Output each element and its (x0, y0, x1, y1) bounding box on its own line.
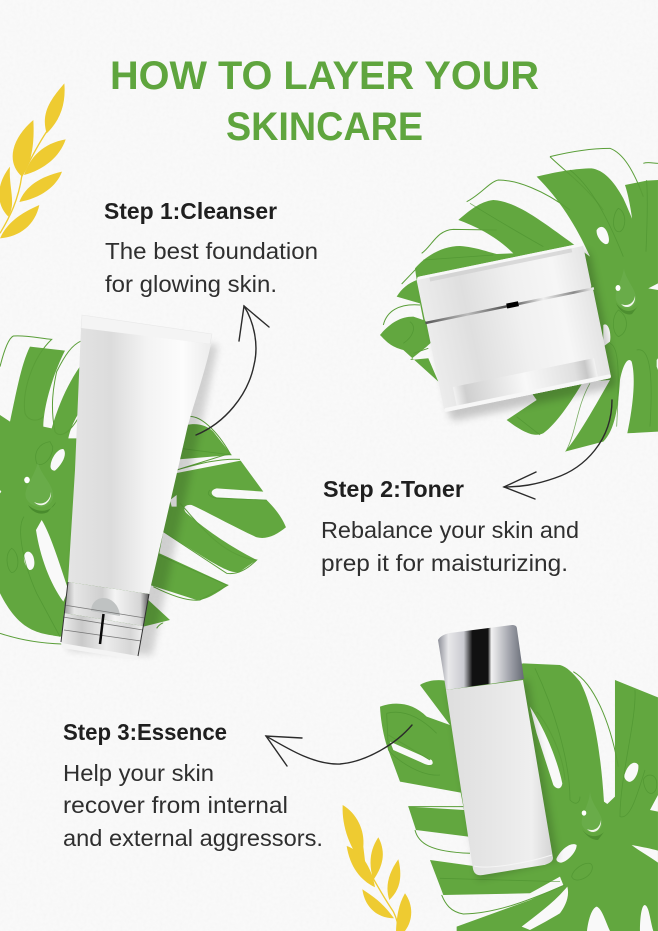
leaf fill left (0, 347, 286, 637)
step 3 heading: Step 3:Essence (63, 719, 227, 745)
arrow: step 1 (196, 306, 269, 435)
step 1 description: The best foundation (105, 238, 318, 264)
title (110, 54, 539, 149)
water drop left (24, 462, 56, 514)
step 1 description (105, 238, 318, 297)
tube crimp (81, 315, 212, 344)
step 3 description (63, 760, 323, 851)
water drop bottom right (582, 790, 604, 840)
jar lid (416, 243, 592, 323)
icon: yellow sprig top left (0, 83, 66, 238)
water drop top right (616, 268, 638, 314)
step 2 description (321, 517, 579, 576)
product: cream jar (416, 242, 617, 422)
white slits (390, 707, 658, 931)
leaf: left (0, 336, 286, 644)
leaf: top right (380, 148, 658, 452)
tube body (68, 328, 211, 594)
text: step 3 (63, 719, 323, 851)
step 2 description: Rebalance your skin and (321, 517, 579, 543)
icon: yellow sprig bottom (343, 805, 411, 931)
step 3 description: recover from internal (63, 792, 288, 818)
arrow: step 2 (504, 400, 612, 499)
step 2 description: prep it for maisturizing. (321, 550, 568, 576)
bottle shadow (448, 680, 558, 880)
jar silver line (425, 287, 594, 324)
tube shadow (68, 335, 218, 655)
outline strokes (0, 336, 257, 644)
jar black mark (506, 301, 519, 309)
step 1 description: for glowing skin. (105, 271, 277, 297)
jar base (426, 288, 611, 412)
product: cleanser tube (61, 315, 218, 660)
hole spots (0, 407, 177, 602)
step 3 description: Help your skin (63, 760, 214, 786)
step 1 heading: Step 1:Cleanser (104, 198, 277, 224)
bottle body (446, 680, 553, 875)
outline strokes (388, 672, 618, 914)
title: HOW TO LAYER YOUR (110, 54, 539, 98)
title: SKINCARE (226, 105, 423, 149)
outline strokes (383, 148, 658, 353)
bottle metal cap (438, 625, 524, 690)
leaf: bottom right (380, 663, 658, 931)
text: step 1 (104, 198, 318, 297)
metal cap (61, 582, 149, 660)
product: essence bottle (438, 625, 558, 880)
step 3 description: and external aggressors. (63, 825, 323, 851)
jar lid rim (417, 243, 584, 284)
step 2 heading: Step 2:Toner (323, 476, 464, 502)
text: step 2 (321, 476, 579, 576)
jar shadow (423, 250, 617, 421)
arrow: step 3 (266, 725, 412, 766)
jar lower band (453, 358, 599, 410)
hole spots (597, 227, 658, 370)
